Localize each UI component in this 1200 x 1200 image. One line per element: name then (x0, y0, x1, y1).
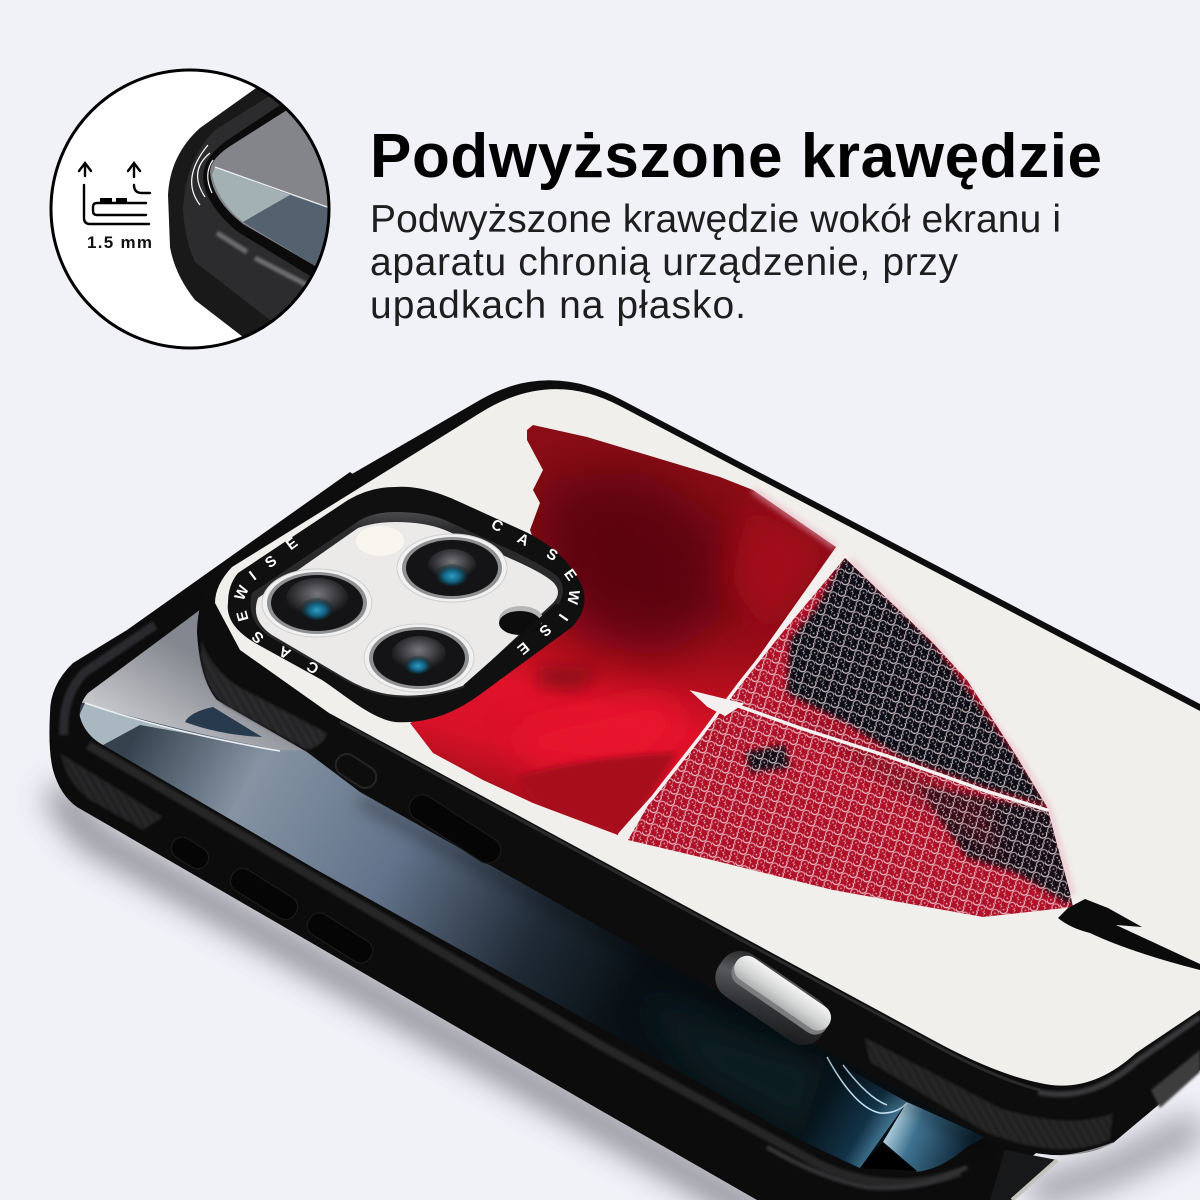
action button (332, 750, 380, 792)
camera ring (228, 487, 584, 722)
ring lettering: E (283, 534, 301, 554)
camera module (228, 487, 584, 722)
frame inner rim (88, 745, 960, 1183)
lens 2 (397, 534, 507, 602)
panel: back phone (49, 472, 1200, 1200)
icon: raised edges diagram (79, 163, 150, 224)
frame highlight (64, 625, 155, 735)
ring lettering: A (514, 530, 532, 550)
ring lettering: W (563, 589, 583, 606)
lower corner light edge (1059, 1143, 1113, 1156)
white paint lines (620, 552, 1047, 834)
ring lettering: I (555, 610, 571, 624)
case corner close-up (168, 88, 328, 336)
bottom frame highlight (767, 1147, 967, 1188)
ring lettering: E (514, 638, 532, 658)
text block: description: Podwyższone krawędzie wokół ekranu i (370, 198, 1061, 241)
text block: description: aparatu chronią urządzenie, przy (370, 241, 958, 284)
camera side carbon patch (201, 640, 327, 750)
black brush tail (1058, 899, 1200, 970)
ring lettering (231, 516, 583, 677)
volume button (404, 790, 506, 868)
front phone shadow (360, 800, 985, 1145)
case frame (49, 472, 1040, 1200)
wedge right (883, 1102, 985, 1172)
corner carbon patch (864, 1037, 1113, 1149)
sequin section (620, 550, 1080, 920)
screen (80, 610, 984, 1172)
ring lettering: C (488, 516, 506, 536)
ring lettering: W (231, 582, 253, 603)
ring lettering: S (536, 620, 554, 640)
white plate (215, 389, 1200, 1086)
wedge left (804, 1069, 907, 1168)
ring lettering: S (262, 552, 280, 572)
right corner patch (1151, 1050, 1200, 1108)
ring lettering: A (276, 642, 294, 662)
lens 1 (262, 569, 372, 637)
back plate artwork (215, 389, 1200, 1086)
lower right shadow (1030, 1125, 1200, 1195)
flash (356, 526, 404, 556)
pink paint edge (753, 490, 1072, 895)
inner bevel (250, 512, 563, 698)
text block: description: upadkach na płasko. (370, 284, 746, 327)
panel: front phone case (197, 380, 1200, 1156)
phone shadow (55, 790, 780, 1200)
ring lettering: E (233, 609, 253, 623)
icon label: 1.5 mm (87, 233, 152, 252)
ring overlap at sensor (465, 605, 558, 687)
camera glass (256, 522, 558, 696)
frame lighter rim (1038, 1017, 1200, 1094)
black triangle (860, 1142, 917, 1171)
silver strip (1012, 1160, 1057, 1200)
ring lettering: S (249, 627, 267, 647)
red paint (410, 425, 836, 835)
ring lettering: E (560, 566, 580, 584)
panel: raised edge detail circle (51, 60, 340, 348)
impact arcs (192, 145, 213, 205)
side buttons (167, 833, 377, 967)
light curves (827, 1057, 907, 1113)
frame plate-edge rim (340, 722, 1040, 1090)
ring lettering: S (543, 545, 561, 565)
heading: title: Podwyższone krawędzie (370, 122, 1102, 191)
corner carbon patch (60, 753, 163, 830)
ring lettering: C (304, 657, 322, 677)
ring lettering: I (246, 568, 260, 584)
case frame (197, 380, 1200, 1155)
lens 3 (364, 624, 474, 692)
lidar sensor (499, 606, 543, 635)
paint shading (510, 470, 830, 835)
power button silver (707, 942, 837, 1054)
lower right silver edge (990, 1150, 1057, 1200)
text block: description (370, 198, 1061, 327)
